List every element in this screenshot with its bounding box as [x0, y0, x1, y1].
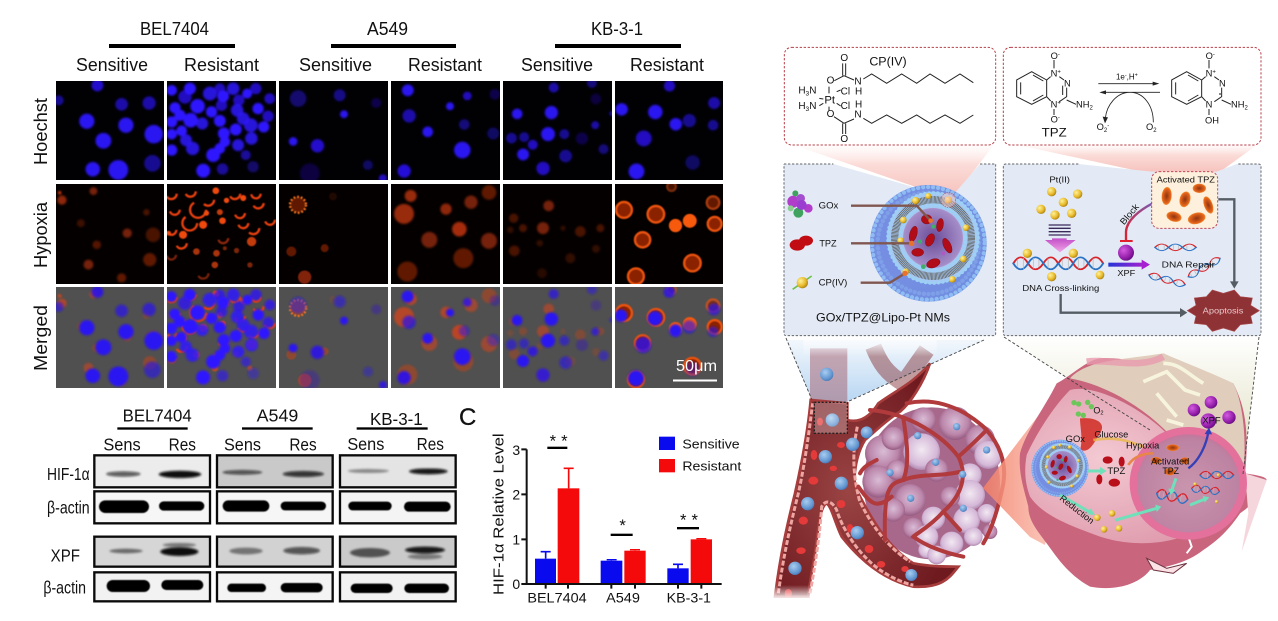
redox arrows: O — [1097, 122, 1104, 132]
blue zoom cone toward blood vessel — [786, 340, 985, 402]
cell labels: GOx — [1066, 434, 1086, 444]
cone tip marker on particle — [941, 193, 956, 207]
significance markers: ** — [680, 510, 699, 529]
callout: CP(IV) chemical structure: 3 — [806, 90, 810, 97]
figure panel A header: cell line labels — [76, 19, 704, 75]
bars — [535, 468, 712, 584]
callout: CP(IV) chemical structure: Pt — [824, 94, 836, 106]
DNA cross-linking label: DNA Cross-linking — [1022, 283, 1100, 293]
activated TPZ box — [1152, 172, 1218, 228]
axis tick labels: 2 — [512, 486, 520, 502]
cell labels: Hypoxia — [1126, 440, 1159, 450]
circulating nanomedicine spheres — [788, 368, 990, 581]
apoptosis burst: Apoptosis — [1203, 305, 1243, 315]
figure panel A header: cell line labels: Resistant — [408, 55, 482, 75]
Pt(II) label and gold spheres: Pt(II) — [1049, 175, 1070, 185]
figure panel A header: cell line labels: A549 — [367, 19, 408, 39]
TPZ molecule: NH — [1076, 100, 1089, 110]
TPZ molecule: N — [1051, 69, 1057, 79]
XPF repair arrow — [1108, 260, 1150, 278]
blot column headers: Res — [169, 435, 196, 455]
axis tick labels — [512, 442, 711, 606]
callout: CP(IV) chemical structure — [784, 47, 996, 145]
cell labels: 2 — [1100, 411, 1103, 417]
legend: Resistant — [682, 459, 742, 474]
bar chart: HIF-1α relative level — [491, 432, 742, 606]
redox arrows: 1e — [1116, 72, 1125, 81]
illustration: tumor cell — [1020, 353, 1267, 588]
figure panel A header: cell line labels: BEL7404 — [140, 19, 209, 39]
blot column headers: Sens — [224, 435, 261, 455]
XPF repair arrow: XPF — [1117, 268, 1135, 278]
axis tick labels: 1 — [512, 531, 520, 547]
significance markers: * — [619, 516, 626, 535]
legend: GOx icon — [787, 190, 813, 218]
blot frames — [94, 455, 456, 601]
callout: CP(IV) chemical structure: CP(IV) — [869, 55, 907, 69]
reduced TPZ radical: NH — [1231, 100, 1244, 110]
callout: CP(IV) chemical structure: H — [855, 86, 862, 97]
alveoli cluster — [862, 407, 1002, 564]
figure panel A header: cell line labels: Resistant — [184, 55, 259, 75]
panel caption: GOx/TPZ@Lipo-Pt NMs — [816, 312, 950, 325]
TPZ molecules in cell — [1096, 456, 1125, 487]
callout: CP(IV) chemical structure: N — [809, 85, 816, 96]
TPZ molecule: - — [1058, 115, 1060, 121]
Pt(II) label and gold spheres — [1036, 175, 1082, 220]
blot column headers: Sens — [103, 435, 141, 455]
callout: CP(IV) chemical structure: H — [855, 99, 862, 110]
blot column headers: Sens — [347, 434, 385, 454]
crosslinked DNA — [1013, 249, 1104, 281]
callout: CP(IV) chemical structure: N — [854, 110, 862, 121]
blot protein labels: XPF — [51, 546, 80, 566]
fade at vessel bottom — [770, 585, 813, 600]
redox arrows: 2 — [1104, 128, 1108, 134]
legend labels and leader lines — [819, 200, 933, 287]
cell labels: Glucose — [1094, 429, 1128, 439]
TPZ molecule: O — [1051, 114, 1058, 124]
legend labels and leader lines: GOx — [819, 200, 839, 210]
dashed lines from liposome panel to vessel — [786, 338, 984, 402]
blot protein labels: β-actin — [47, 497, 90, 517]
blot column headers: BEL7404 — [123, 406, 192, 426]
callout: CP(IV) chemical structure: H — [798, 85, 806, 96]
cell labels: XPF — [1202, 415, 1221, 425]
reduced TPZ radical: N — [1206, 69, 1212, 79]
axis tick labels: 0 — [512, 576, 520, 592]
reduced TPZ radical: + — [1212, 70, 1216, 76]
significance markers: ** — [550, 432, 568, 451]
scale bar: 50 μm — [673, 358, 717, 382]
callout: CP(IV) chemical structure: H — [798, 101, 806, 112]
reduced TPZ radical: N — [1219, 79, 1226, 89]
figure panel A header: cell line labels: Resistant — [630, 55, 704, 75]
arrow: activated TPZ to apoptosis — [1218, 199, 1239, 289]
activated TPZ box: Activated TPZ — [1157, 174, 1215, 184]
callout: CP(IV) chemical structure: N — [809, 101, 816, 112]
panel: GOx/TPZ@Lipo-Pt nanomedicine — [784, 164, 996, 336]
redox arrows: + — [1135, 73, 1138, 79]
legend — [659, 436, 742, 474]
vessel wall beads — [778, 403, 913, 593]
torn membrane top — [1070, 353, 1245, 473]
western blot panel — [43, 406, 456, 601]
y axis title: HIF-1α Relative Level — [491, 433, 507, 595]
cell body — [1020, 353, 1267, 588]
pink callout cone toward liposome — [785, 142, 996, 198]
TPZ molecule: - — [1058, 52, 1060, 58]
reduced TPZ radical: - — [1213, 52, 1215, 58]
illustration: blood vessel and tumor tissue — [770, 340, 1004, 600]
pink callout cone toward activated TPZ — [1004, 142, 1261, 174]
figure panel A header: cell line labels: Sensitive — [521, 55, 593, 75]
cell labels: Reduction — [1058, 493, 1096, 526]
blot column headers: Res — [417, 434, 444, 454]
legend labels and leader lines: CP(IV) — [819, 277, 847, 287]
XPF protein — [1118, 245, 1134, 261]
cell labels: TPZ — [1162, 466, 1180, 476]
TPZ molecule — [1017, 51, 1093, 140]
callout: CP(IV) chemical structure: O — [827, 76, 835, 87]
panel label C: C — [459, 404, 476, 431]
inner cell surface — [1025, 389, 1240, 543]
gold Pt dots — [1094, 473, 1220, 533]
redox arrows: - — [1107, 123, 1109, 129]
blot protein labels — [43, 464, 90, 597]
activated TPZ in nucleus — [1151, 444, 1190, 475]
callout: CP(IV) chemical structure: Cl — [841, 86, 850, 97]
TPZ molecule: + — [1057, 70, 1061, 76]
blot column headers: A549 — [257, 406, 298, 426]
cell labels: O — [1093, 405, 1100, 415]
callout: CP(IV) chemical structure: O — [840, 134, 848, 145]
TPZ molecule: O — [1051, 51, 1058, 61]
salmon zoom cone from tissue to cell — [983, 378, 1075, 545]
axis tick labels: KB-3-1 — [667, 590, 711, 606]
scale bar: 50 μm: 50μm — [676, 358, 717, 375]
cell labels — [1058, 405, 1221, 526]
callout: CP(IV) chemical structure: N — [854, 76, 862, 87]
microscopy row: Hypoxia — [39, 180, 757, 414]
callout: CP(IV) chemical structure: O — [827, 109, 835, 120]
blot protein labels: β-actin — [43, 577, 86, 597]
reduced TPZ radical: OH — [1205, 115, 1219, 125]
blot column headers: Res — [289, 435, 317, 455]
blot protein labels: HIF-1α — [47, 464, 90, 484]
magnified vessel fragment — [803, 340, 937, 402]
row labels: Hoechst, Hypoxia, Merged: Hypoxia — [31, 201, 51, 268]
reduced TPZ radical: 2 — [1244, 106, 1248, 112]
nucleus — [1133, 431, 1243, 536]
figure panel A header: cell line labels: KB-3-1 — [591, 19, 643, 39]
repaired DNA helices — [1148, 244, 1222, 288]
TPZ molecule: N — [1051, 99, 1057, 109]
liposome nanoparticle — [870, 185, 987, 302]
green pathway arrows — [1060, 471, 1205, 520]
reduced TPZ radical: N — [1206, 99, 1212, 109]
repaired DNA helices: DNA Repair — [1162, 259, 1215, 269]
redox arrows: ,H — [1127, 72, 1135, 81]
significance markers — [547, 432, 699, 536]
reduced TPZ radical: O — [1206, 51, 1213, 61]
TPZ molecule: N — [1064, 79, 1071, 89]
microscopy row: Merged — [39, 180, 757, 414]
row labels: Hoechst, Hypoxia, Merged — [31, 98, 51, 371]
row labels: Hoechst, Hypoxia, Merged: Hoechst — [31, 98, 51, 165]
axis tick labels: 3 — [512, 442, 520, 458]
apoptosis burst — [1187, 290, 1259, 331]
blot bands — [106, 468, 448, 559]
microscopy row: Hoechst — [40, 11, 746, 243]
panel: mechanism of action — [1003, 164, 1261, 336]
TPZ molecule: TPZ — [1042, 126, 1067, 140]
nanomedicine inside cell — [1031, 440, 1089, 497]
oxygen molecules — [1071, 400, 1094, 418]
callout: CP(IV) chemical structure: O — [840, 53, 848, 64]
callout: CP(IV) chemical structure: 3 — [806, 106, 810, 113]
reduced TPZ radical — [1172, 51, 1248, 125]
dashed lines from mechanism panel to cell — [1004, 337, 1259, 474]
redox arrows: O — [1146, 122, 1153, 132]
vessel body — [775, 363, 958, 597]
callout: CP(IV) chemical structure: Cl — [841, 101, 850, 112]
dashed zoom box on vessel — [814, 402, 847, 433]
redox arrows — [1097, 72, 1160, 134]
DNA inside nucleus — [1156, 471, 1234, 504]
cell labels: Activated — [1151, 457, 1189, 467]
legend: CP(IV) icon — [793, 276, 812, 289]
callout: TPZ reduction chemistry — [1003, 47, 1261, 145]
beige zoom cone toward tumor cell — [1003, 336, 1259, 475]
legend labels and leader lines: TPZ — [819, 239, 837, 249]
downward pink arrow — [1045, 225, 1076, 252]
arrow: cross-linking to apoptosis — [1061, 294, 1187, 317]
cell inner oxygen and glucose flow — [1080, 418, 1102, 451]
axis tick labels: BEL7404 — [527, 590, 587, 606]
figure panel A header: cell line labels: Sensitive — [299, 55, 372, 75]
axis tick labels: A549 — [606, 590, 640, 606]
XPF protein spheres — [1188, 396, 1236, 429]
capillary network — [858, 402, 1004, 557]
vessel red cells — [785, 418, 909, 598]
legend: Sensitive — [682, 436, 740, 451]
blot column headers — [103, 406, 444, 455]
TPZ molecule: 2 — [1089, 106, 1093, 112]
redox arrows: 2 — [1153, 128, 1157, 134]
redox arrows: - — [1125, 73, 1127, 79]
axes and ticks — [521, 449, 722, 589]
blue arrow to XPF — [1188, 432, 1208, 468]
blot column headers: KB-3-1 — [370, 409, 423, 429]
TPZ molecule: + — [1057, 100, 1061, 106]
block inhibition line: Block — [1118, 201, 1141, 227]
legend: TPZ icon — [790, 236, 813, 251]
row labels: Hoechst, Hypoxia, Merged: Merged — [31, 305, 51, 371]
figure panel A header: cell line labels: Sensitive — [76, 55, 148, 75]
cell labels: TPZ — [1107, 466, 1126, 476]
block inhibition line — [1118, 201, 1153, 242]
